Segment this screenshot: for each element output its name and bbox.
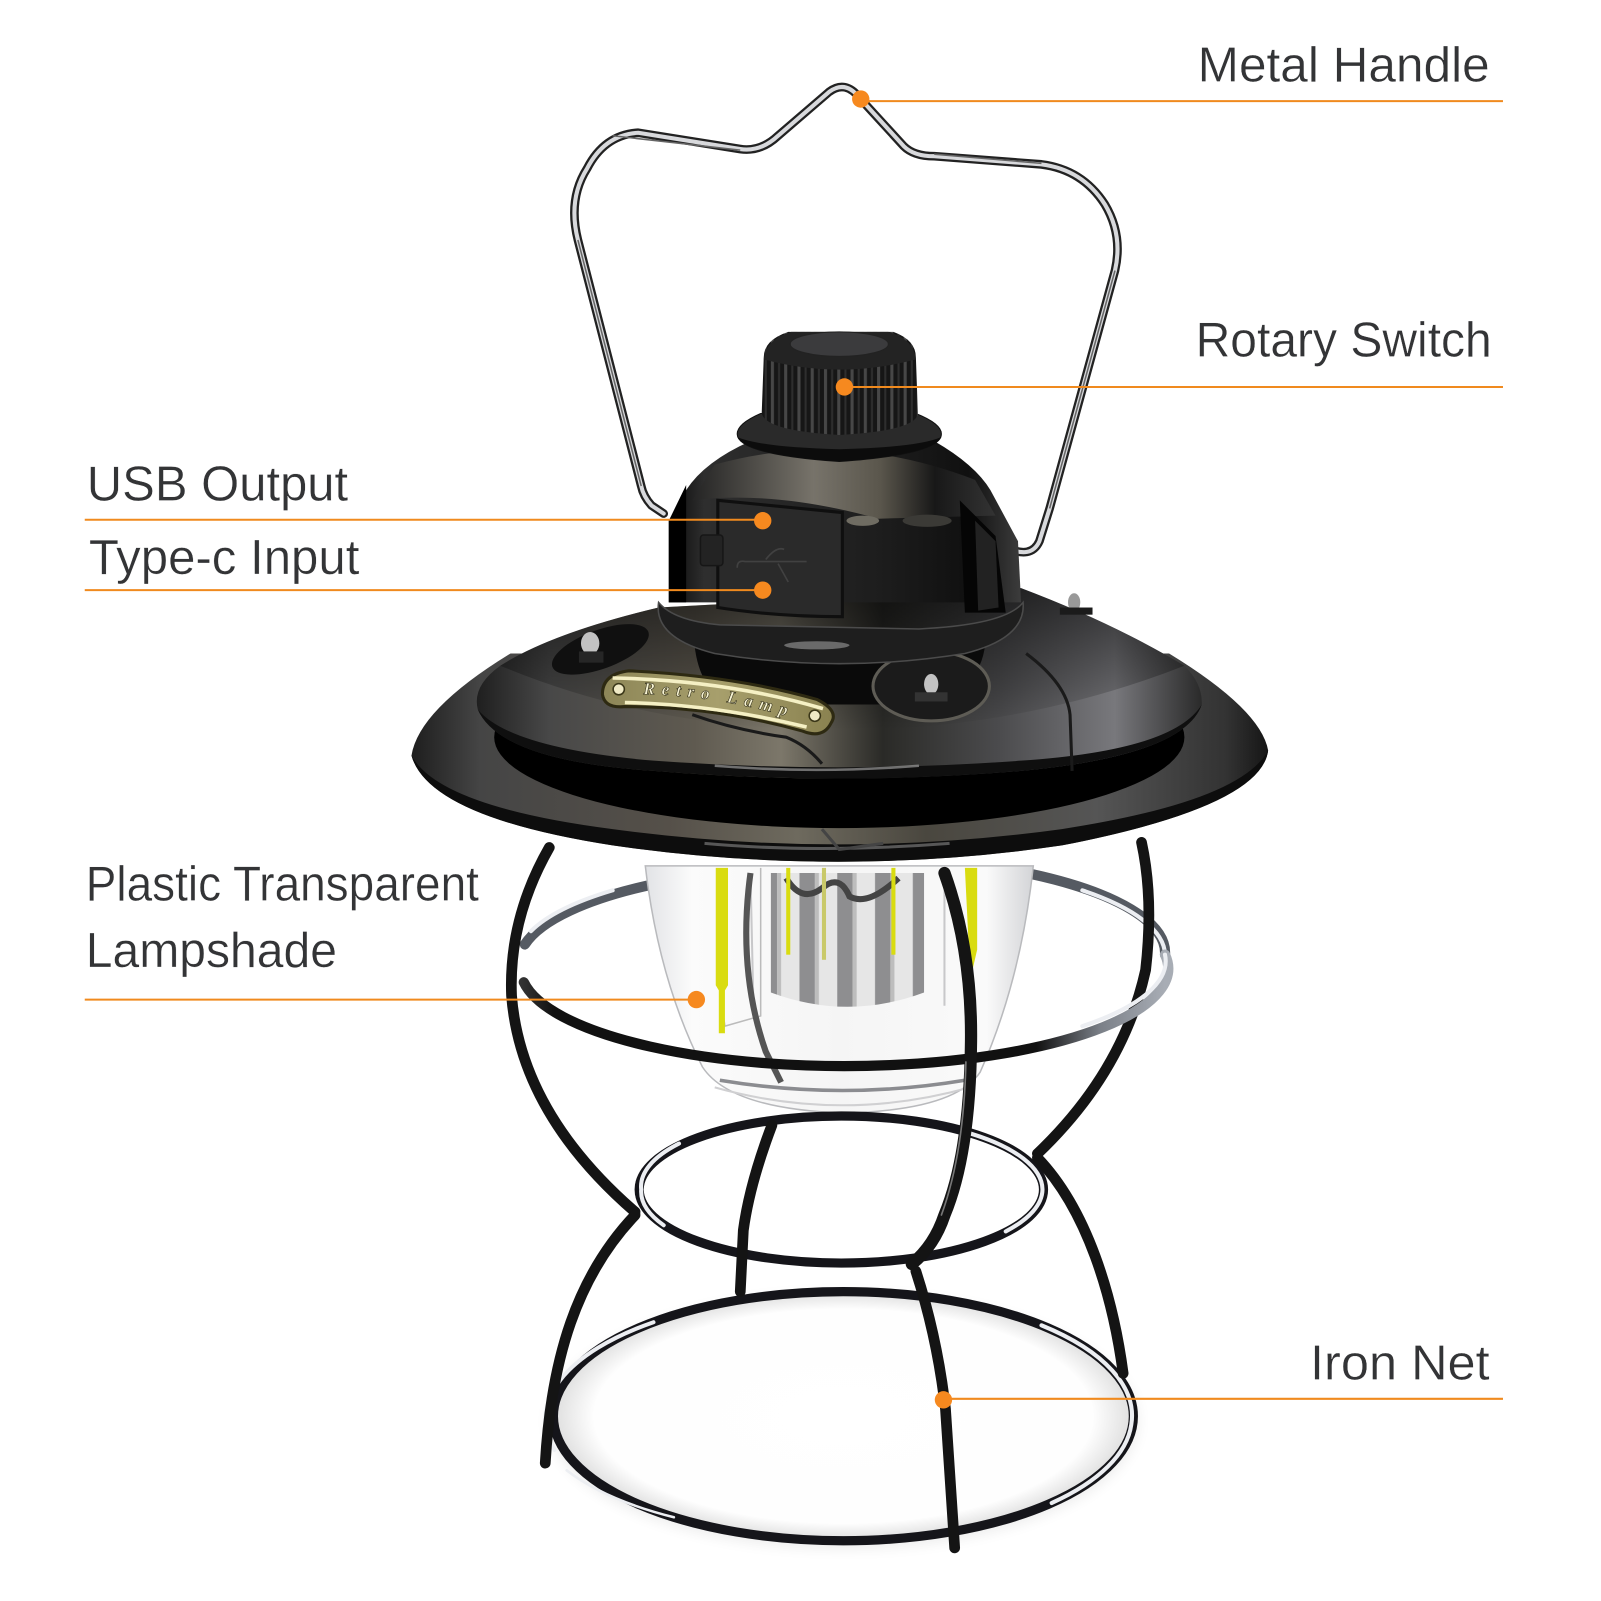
back rod [740,1125,772,1292]
callout: Type-c Input: Type-c Input [89,531,360,585]
rotary switch knob [762,332,918,435]
base floor shading [549,1292,1137,1548]
lower brim [411,646,1268,862]
product: retro lantern [411,82,1268,1554]
plastic transparent lampshade [645,866,1033,1113]
callout: Metal Handle: Metal Handle [1198,39,1490,93]
inner support rod [746,873,781,1082]
base ring [546,1292,1133,1541]
upper disc [477,588,1202,779]
cage frame right [1037,842,1149,1373]
rotary switch collar [737,414,941,462]
nameplate: Retro Lamp [600,669,835,736]
callout: USB Output: USB Output [87,457,349,511]
callout: Rotary Switch: Rotary Switch [1196,313,1492,367]
nameplate: Retro Lamp: Retro Lamp [642,682,788,718]
upper ring back arc [525,874,1165,955]
callout: Plastic Transparent Lampshade [85,858,705,1008]
callout: Plastic Transparent Lampshade: Plastic Transparent [86,858,479,912]
usb port cover [700,500,842,617]
callout: Rotary Switch [836,313,1503,396]
light tube cylinder [722,868,944,1026]
yellow filaments [716,868,977,1033]
upper ring front arc [524,955,1168,1066]
callout: Metal Handle [852,39,1503,108]
middle ring [639,1116,1044,1263]
callout: USB Output [85,457,771,529]
upper ring right highlight [1082,955,1166,1026]
callout: Type-c Input [85,531,771,599]
front rod [912,873,971,1548]
lamp head body [658,441,1023,664]
callout: Iron Net [935,1336,1503,1409]
metal handle [574,87,1117,552]
skirt [658,602,1023,664]
bolt back [1060,593,1093,615]
callout: Iron Net: Iron Net [1310,1336,1490,1390]
cable reflections [692,653,1072,771]
callout: Plastic Transparent Lampshade: Lampshade [86,924,337,978]
dark neck [694,643,985,705]
cage frame left [511,847,635,1463]
bolt right [873,651,989,721]
bolt left [546,614,655,685]
